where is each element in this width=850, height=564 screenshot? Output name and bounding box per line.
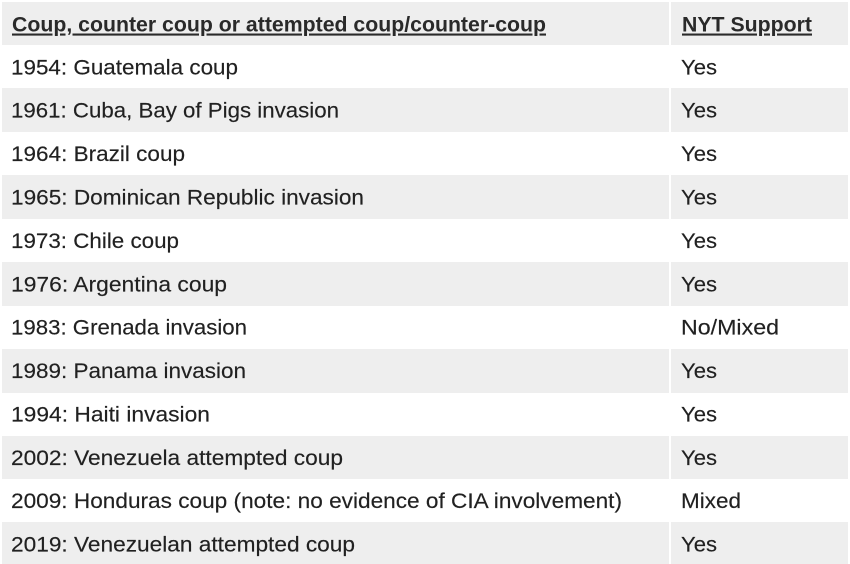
- row: 1961: Yes: [681, 98, 717, 122]
- row: 1965: 1965: Dominican Republic invasion: [11, 186, 364, 210]
- header row: NYT Support: [682, 14, 812, 36]
- row: 1961: [2, 88, 848, 132]
- row: 2002: [2, 436, 848, 479]
- row: 1994: 1994: Haiti invasion: [11, 402, 210, 426]
- row: 2009: 2009: Honduras coup (note: no evidence of CIA involvement): [11, 489, 622, 513]
- header row: [2, 2, 848, 45]
- row: 2019: [2, 522, 848, 564]
- row: 2002: 2002: Venezuela attempted coup: [11, 446, 343, 470]
- row: 1976: Yes: [681, 272, 717, 296]
- row: 1954: [11, 56, 717, 80]
- row: 1973: [11, 229, 717, 253]
- row: 2009: Mixed: [681, 489, 741, 513]
- row: 1989: 1989: Panama invasion: [11, 359, 246, 383]
- row: 1965: Yes: [681, 186, 717, 210]
- row: 1976: 1976: Argentina coup: [11, 272, 227, 296]
- row: 1983: [11, 316, 779, 340]
- row: 1983: 1983: Grenada invasion: [11, 316, 247, 340]
- row: 1965: [2, 175, 848, 219]
- row: 2019: Yes: [681, 532, 717, 556]
- row: 1964: 1964: Brazil coup: [11, 142, 185, 166]
- row: 1976: [2, 262, 848, 306]
- row: 1954: Yes: [681, 56, 717, 80]
- row: 1994: Yes: [681, 402, 717, 426]
- row: 1973: Yes: [681, 229, 717, 253]
- row: 1989: [2, 349, 848, 393]
- row: 2019: 2019: Venezuelan attempted coup: [11, 532, 355, 556]
- row: 1989: Yes: [681, 359, 717, 383]
- row: 1973: 1973: Chile coup: [11, 229, 179, 253]
- header row: Coup, counter coup or attempted coup/counter-coup: [12, 14, 546, 36]
- row: 1983: No/Mixed: [681, 316, 779, 340]
- row: 2002: Yes: [681, 446, 717, 470]
- row: 1964: Yes: [681, 142, 717, 166]
- row: 1994: [11, 402, 717, 426]
- row: 1961: 1961: Cuba, Bay of Pigs invasion: [11, 98, 339, 122]
- row: 1954: 1954: Guatemala coup: [11, 56, 238, 80]
- row: 1964: [11, 142, 717, 166]
